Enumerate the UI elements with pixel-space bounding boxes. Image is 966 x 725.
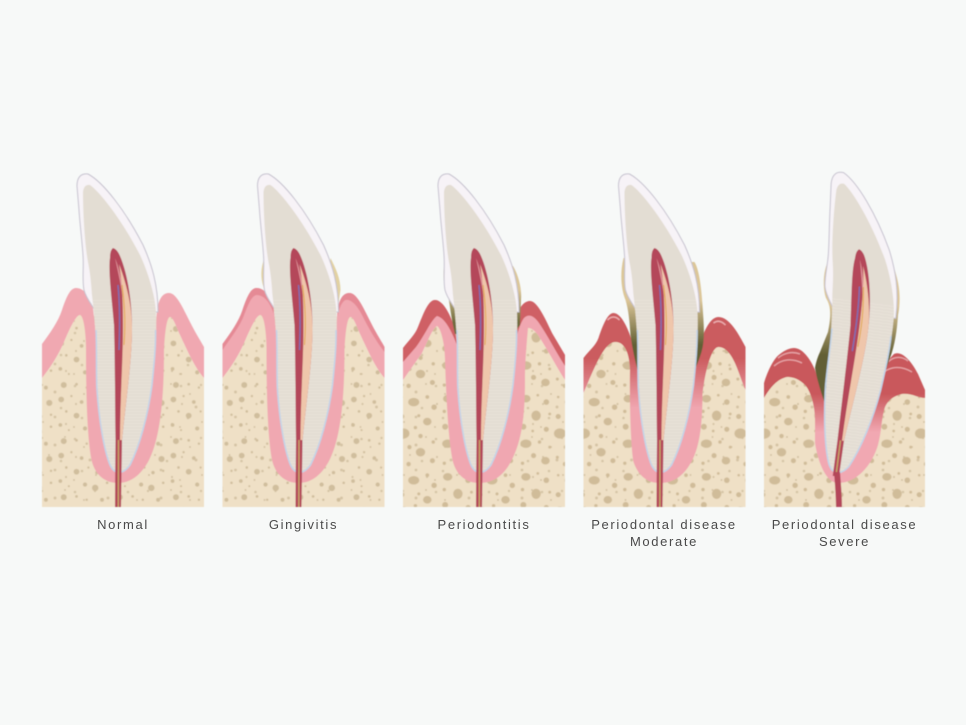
gum inflamed edge: periodontitis (403, 300, 565, 366)
tartar: severe (815, 258, 900, 412)
gum: normal (42, 288, 204, 483)
tartar: periodontitis (444, 263, 521, 334)
tooth: periodontitis (438, 174, 519, 507)
label: normal: Normal (97, 517, 149, 532)
bone: severe (764, 377, 925, 507)
tooth: normal (77, 174, 158, 507)
panel: gingivitis (222, 174, 384, 507)
bone: periodontitis (403, 326, 565, 507)
gum: severe (764, 348, 925, 483)
label: periodontal disease severe: Periodontal disease (772, 517, 917, 532)
panel: severe (764, 171, 925, 512)
tartar: gingivitis (261, 258, 340, 312)
gum highlights: moderate (608, 317, 726, 325)
gum inflamed edge: gingivitis (222, 288, 384, 352)
label: periodontitis: Periodontitis (438, 517, 530, 532)
gum: moderate (584, 313, 746, 483)
tooth: gingivitis (258, 174, 338, 507)
gum ridges: severe (774, 353, 912, 372)
bone: moderate (584, 342, 746, 507)
label: periodontal disease moderate: Moderate (630, 534, 698, 549)
panel: moderate (584, 174, 746, 507)
tooth: moderate (618, 174, 700, 507)
label: periodontal disease severe: Severe (819, 534, 870, 549)
panel: normal (42, 174, 204, 507)
tartar: moderate (621, 258, 704, 378)
bone: gingivitis (222, 315, 384, 507)
label: periodontal disease moderate: Periodontal disease (591, 517, 737, 532)
tooth: severe (823, 171, 898, 476)
root canal end: severe (834, 472, 842, 507)
bone: normal (42, 315, 204, 507)
gum: periodontitis (403, 300, 565, 483)
panel: periodontitis (403, 174, 565, 507)
gum: gingivitis (222, 288, 384, 483)
label: gingivitis: Gingivitis (269, 517, 338, 532)
